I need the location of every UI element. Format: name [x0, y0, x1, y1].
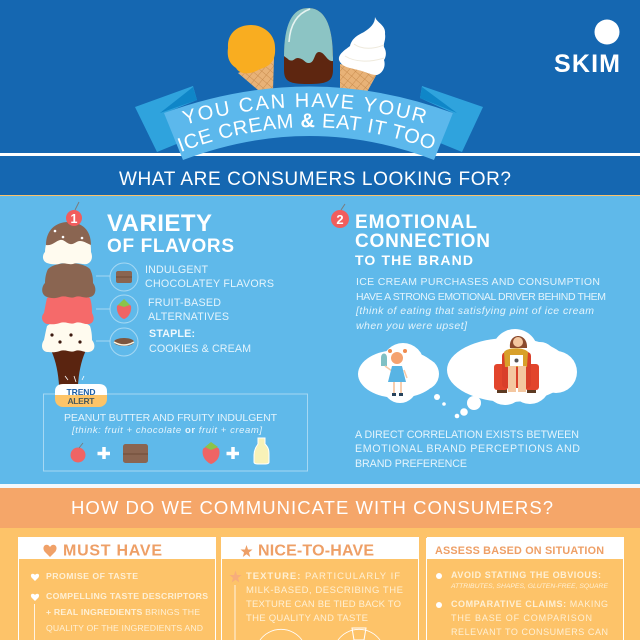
icon: woman in armchair — [494, 336, 539, 393]
trend alert badge — [55, 384, 107, 407]
card heading: assess: ASSESS BASED ON SITUATION — [435, 545, 604, 557]
banner text: ICE CREAM & EAT IT TOO — [178, 113, 435, 152]
flavor row: cookies: STAPLE: — [149, 328, 195, 340]
heading: emotional connection — [355, 212, 490, 268]
list: assess: AVOID STATING THE OBVIOUS: — [451, 570, 601, 580]
icon: popsicle — [284, 8, 333, 84]
badge: number 2: 2 — [336, 212, 344, 227]
icon: ice cream stack — [42, 202, 95, 385]
list: assess: COMPARATIVE CLAIMS: MAKING — [451, 599, 608, 609]
trend alert text: PEANUT BUTTER AND FRUITY INDULGENT — [64, 412, 278, 424]
white divider lower — [0, 484, 640, 488]
flavor row: chocolate — [96, 263, 274, 291]
banner text — [178, 93, 435, 152]
list: must have: PROMISE OF TASTE — [46, 571, 138, 581]
list: must have — [31, 571, 208, 640]
card: must have — [18, 537, 216, 640]
section band: communicate — [0, 488, 640, 528]
text: texture: MILK-BASED, DESCRIBING THE — [246, 585, 403, 596]
flavor row: chocolate: CHOCOLATEY FLAVORS — [145, 278, 274, 290]
list: must have: COMPELLING TASTE DESCRIPTORS — [46, 591, 208, 601]
list: must have: QUALITY OF THE INGREDIENTS AND — [46, 623, 203, 633]
badge: number 1: 1 — [71, 212, 78, 226]
trend alert box — [44, 376, 308, 471]
text: texture: TEXTURE: PARTICULARLY IF — [246, 571, 400, 582]
text: texture: THE QUALITY AND TASTE — [246, 613, 368, 624]
text: texture: TEXTURE CAN BE TIED BACK TO — [246, 599, 401, 610]
heading: variety of flavors — [107, 210, 234, 257]
flavor row: cookies: COOKIES & CREAM — [149, 343, 251, 355]
flavor row: cookies — [96, 328, 251, 356]
card: assess based on situation — [426, 537, 624, 640]
heading: variety of flavors: VARIETY — [107, 210, 212, 237]
list: assess: THE BASE OF COMPARISON — [451, 613, 592, 623]
header background — [0, 0, 640, 153]
list: assess — [436, 570, 608, 637]
trend alert badge: TREND — [66, 387, 96, 397]
thought cloud: girl — [358, 343, 446, 406]
list: assess: RELEVANT TO CONSUMERS CAN — [451, 627, 608, 637]
icon: soft serve cone — [339, 17, 386, 92]
equation: strawberry plus milk — [203, 438, 269, 464]
text: direct correlation — [355, 429, 580, 470]
text: emotional driver: ICE CREAM PURCHASES AND CONSUMPTION — [356, 276, 600, 288]
text: direct correlation: A DIRECT CORRELATION EXISTS BETWEEN — [355, 429, 579, 441]
list: assess: ATTRIBUTES, SHAPES, GLUTEN-FREE, SQUARE — [450, 583, 608, 590]
text: emotional driver — [355, 276, 606, 332]
card: nice to have — [221, 537, 419, 640]
heading: variety of flavors: OF FLAVORS — [107, 236, 234, 257]
badge: number 2 — [331, 204, 349, 228]
banner ribbon — [135, 86, 483, 160]
trend alert box: [think: fruit + chocolate or fruit + cream] — [71, 425, 262, 436]
icon: girl with popsicle — [381, 349, 407, 396]
white divider — [0, 153, 640, 156]
heading: emotional connection: EMOTIONAL — [355, 212, 477, 233]
badge: number 1 — [66, 210, 82, 226]
section band: consumers: WHAT ARE CONSUMERS LOOKING FOR? — [119, 169, 511, 190]
text: emotional driver: [think of eating that satisfying pint of ice cream — [355, 305, 594, 317]
logo: SKIM — [554, 20, 620, 78]
text: direct correlation: EMOTIONAL BRAND PERCEPTIONS AND — [355, 443, 580, 455]
equation: cherry plus chocolate — [70, 443, 148, 463]
text: direct correlation: BRAND PREFERENCE — [355, 458, 467, 470]
text: texture — [230, 570, 403, 640]
panel: consumers background — [0, 196, 640, 484]
heading: emotional connection: TO THE BRAND — [355, 252, 473, 268]
icon: orange ice cream cone — [228, 25, 275, 90]
banner text: YOU CAN HAVE YOUR — [182, 93, 426, 124]
text: emotional driver: when you were upset] — [356, 320, 468, 332]
logo: SKIM: SKIM — [554, 50, 620, 78]
card heading: nice to have: NICE-TO-HAVE — [258, 542, 374, 560]
flavor row: fruit — [96, 295, 229, 323]
text: emotional driver: HAVE A STRONG EMOTIONAL DRIVER BEHIND THEM — [356, 291, 606, 303]
flavor row: fruit: FRUIT-BASED — [148, 297, 221, 309]
trend alert badge: ALERT — [68, 396, 95, 406]
section band: consumers — [0, 156, 640, 195]
section band: communicate: HOW DO WE COMMUNICATE WITH CONSUMERS? — [71, 497, 553, 518]
panel: communicate background — [0, 528, 640, 640]
flavor row: fruit: ALTERNATIVES — [148, 311, 229, 323]
card heading: must have: MUST HAVE — [63, 542, 162, 560]
flavor row: chocolate: INDULGENT — [145, 264, 208, 276]
thought cloud: woman — [447, 329, 577, 418]
heading: emotional connection: CONNECTION — [355, 231, 490, 252]
list: must have: + REAL INGREDIENTS BRINGS THE — [46, 607, 200, 617]
